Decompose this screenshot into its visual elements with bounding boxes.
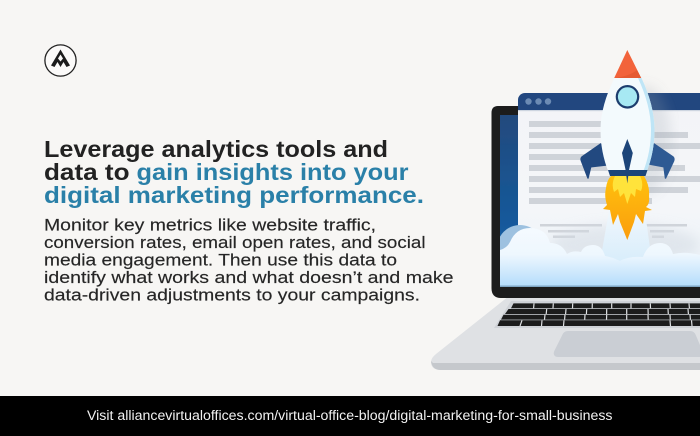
heading: digital marketing performance. (44, 182, 424, 208)
icon: company logo (45, 45, 76, 76)
heading: gain insights into your (136, 159, 408, 185)
body text: media engagement. Then use this data to (44, 251, 397, 270)
clouds and exhaust plume (500, 224, 700, 287)
engine ring (608, 170, 648, 176)
trackpad (556, 333, 700, 355)
body text (44, 216, 454, 305)
rocket illustration (581, 50, 674, 240)
body text: Monitor key metrics like website traffic, (44, 216, 376, 235)
porthole (616, 85, 639, 109)
body text: data-driven adjustments to your campaigns. (44, 286, 420, 305)
laptop base (431, 296, 700, 370)
rocket nose (614, 50, 641, 78)
laptop illustration (431, 93, 700, 370)
keyboard (494, 301, 700, 328)
flame (603, 176, 652, 240)
heading (44, 136, 424, 208)
body text: identify what works and what doesn’t and make (44, 268, 454, 287)
centre fin (622, 139, 633, 184)
body text: conversion rates, email open rates, and social (44, 233, 426, 252)
footer bar: Visit alliancevirtualoffices.com/virtual-office-blog/digital-marketing-for-small-business (87, 408, 613, 423)
heading: data to (44, 159, 130, 185)
browser window (518, 93, 700, 287)
fins (581, 144, 674, 178)
footer bar (0, 396, 700, 436)
laptop screen bezel (492, 106, 700, 298)
rocket body (600, 78, 654, 172)
screen blue strip (500, 115, 520, 287)
rocket shadow (619, 85, 671, 195)
heading: Leverage analytics tools and (44, 136, 388, 162)
